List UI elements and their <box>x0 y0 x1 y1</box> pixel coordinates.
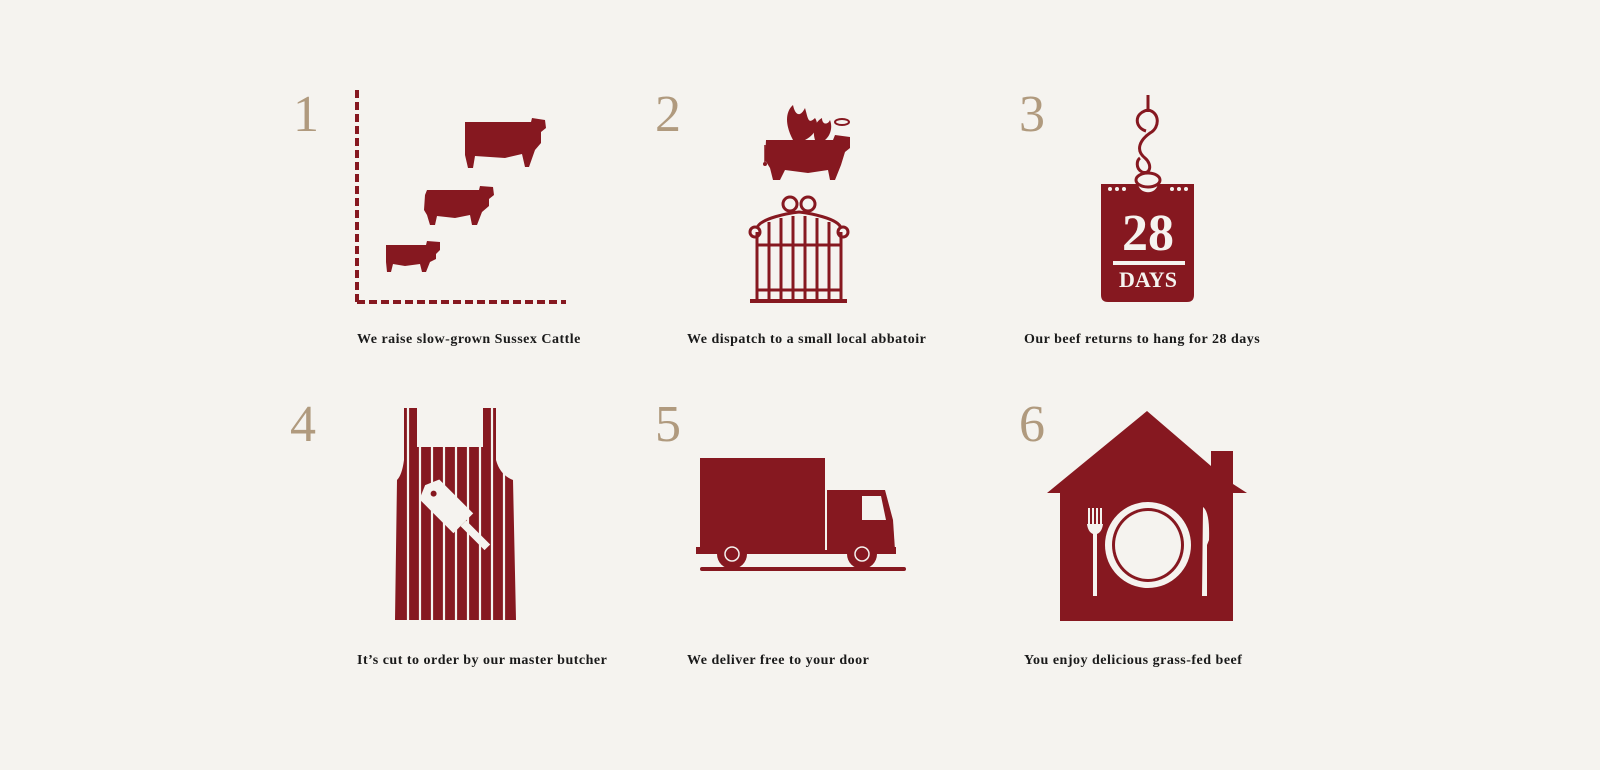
chart: growth axis <box>357 90 566 302</box>
number 6: 6 <box>1019 396 1045 453</box>
icon: middle cow <box>424 186 494 225</box>
panel: step 2 <box>655 86 926 347</box>
number 4: 4 <box>290 396 316 453</box>
caption 4: It’s cut to order by our master butcher <box>357 653 607 668</box>
panel: step 5 <box>655 396 906 668</box>
icon: abattoir gate <box>750 197 848 300</box>
panel: step 3 <box>1019 86 1260 347</box>
icon: small cow <box>386 241 440 272</box>
number 1: 1 <box>293 86 319 143</box>
caption 6: You enjoy delicious grass-fed beef <box>1024 653 1242 668</box>
caption 1: We raise slow-grown Sussex Cattle <box>357 332 581 347</box>
icon: meat hook <box>1136 95 1160 187</box>
icon: 28 days tag <box>1101 184 1194 302</box>
panel: step 1 <box>293 86 581 347</box>
icon: house with plate <box>1047 411 1247 621</box>
number 2: 2 <box>655 86 681 143</box>
caption 3: Our beef returns to hang for 28 days <box>1024 332 1260 347</box>
panel: step 4 <box>290 396 607 668</box>
icon: 28 days tag: 28 <box>1122 205 1174 262</box>
icon: striped apron with cleaver <box>395 408 516 620</box>
icon: 28 days tag: DAYS <box>1119 267 1177 292</box>
icon: delivery truck <box>696 458 906 571</box>
icon: big cow <box>465 118 546 168</box>
panel: step 6 <box>1019 396 1247 668</box>
icon: winged pig with halo <box>763 105 850 180</box>
caption 5: We deliver free to your door <box>687 653 869 668</box>
caption 2: We dispatch to a small local abbatoir <box>687 332 926 347</box>
number 5: 5 <box>655 396 681 453</box>
number 3: 3 <box>1019 86 1045 143</box>
